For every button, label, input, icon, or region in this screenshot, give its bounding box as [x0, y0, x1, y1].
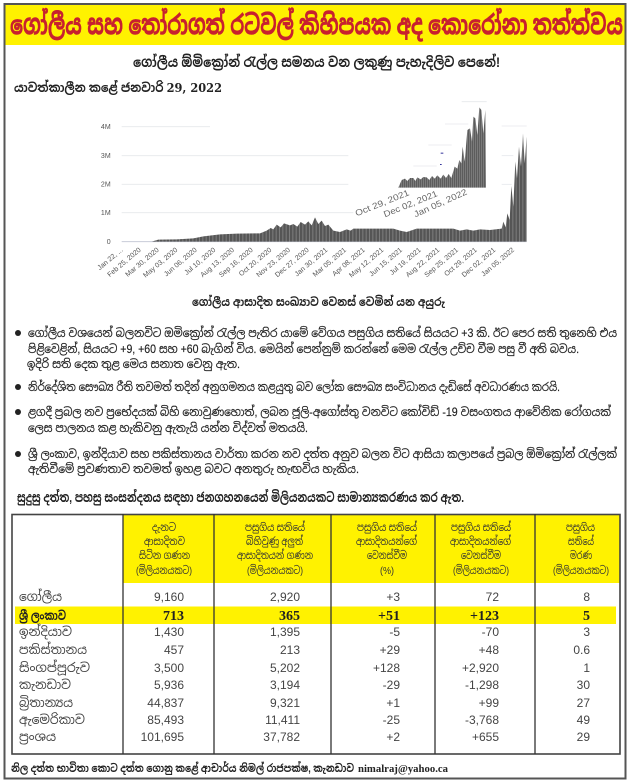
bullet 1: ඉදිරි සති දෙක තුළ මෙය සනාත වෙනු ඇත.	[27, 357, 240, 371]
row: India: ඉන්දියාව	[19, 624, 72, 639]
column 1 header: (මිලියනයකට)	[136, 564, 192, 577]
x axis date labels: Aug 13, 2020	[200, 247, 236, 279]
inset date labels: Oct 29, 2021	[354, 187, 411, 218]
chart caption: ගෝලීය ආසාදිත සංඛ්‍යාව වෙනස් වෙමින් යන අයුරු	[192, 294, 445, 309]
row: India	[19, 624, 590, 639]
row: France: 101,695	[141, 730, 184, 744]
column 5 header	[553, 522, 609, 577]
x axis date labels: Sep 25, 2021	[424, 247, 460, 279]
x axis date labels: Jan 05, 2022	[480, 247, 516, 278]
row: Britain	[19, 695, 590, 710]
row: Singapore: සිංගප්පූරුව	[19, 660, 90, 675]
row: Canada: -29	[383, 678, 400, 692]
area series: main	[152, 133, 527, 242]
row: Pakistan: +48	[479, 643, 499, 657]
row: America: 85,493	[147, 713, 184, 727]
row: global: 2,920	[270, 590, 300, 604]
row: Sri Lanka: 365	[279, 609, 300, 624]
row: Canada: 3,194	[270, 678, 300, 692]
column 4 header: (මිලියනයකට)	[453, 564, 509, 577]
x axis date labels: Jan 22, ...	[97, 247, 125, 272]
row: global: 9,160	[154, 590, 184, 604]
column 1 header: සිටින ගණන	[139, 549, 190, 562]
source credit: nimalraj@yahoo.ca	[358, 764, 448, 775]
row: India: 1,395	[270, 625, 300, 639]
x axis date labels: Oct 20, 2020	[238, 247, 273, 278]
row: America: 49	[577, 713, 590, 727]
y axis labels: 1M	[101, 210, 111, 217]
column 2 header	[237, 520, 313, 577]
row: France: +655	[472, 730, 499, 744]
y axis labels: 3M	[101, 153, 111, 160]
x axis date labels: Mar 30, 2020	[125, 247, 161, 279]
y axis labels: 0	[107, 239, 111, 246]
inset date labels: Dec 02, 2021	[382, 188, 439, 219]
row: France	[19, 730, 590, 744]
row: Canada: -1,298	[465, 678, 499, 692]
row: Sri Lanka: +123	[470, 609, 499, 624]
row: Singapore: +2,920	[462, 661, 499, 675]
x axis date labels: Sep 16, 2020	[218, 247, 255, 279]
row: America: -25	[383, 713, 400, 727]
row: France: 37,782	[263, 730, 300, 744]
column 4 header: ආසාදිතයන්ගේ	[450, 534, 511, 548]
row: Singapore: +128	[373, 661, 400, 675]
x axis date labels: May 12, 2021	[348, 247, 385, 279]
x axis date labels: Oct 29, 2021	[443, 247, 479, 278]
bullet 3: ලෙස පාලනය කළ හැකිවනු ඇතැයි යන්න විද්වත් මතයයි.	[28, 421, 308, 435]
column 4 header	[450, 520, 511, 577]
row: Canada: 5,936	[154, 678, 184, 692]
row: Singapore	[19, 660, 590, 675]
x axis date labels: Mar 05, 2021	[312, 247, 348, 279]
column 5 header: මරණ	[570, 549, 592, 562]
column 4 header: පසුගිය සතියේ	[451, 520, 511, 534]
row: Pakistan: +29	[380, 643, 400, 657]
x axis date labels: Jan 30, 2021	[294, 247, 329, 278]
row: global: ගෝලීය	[19, 589, 62, 604]
row: Pakistan: 213	[280, 643, 300, 657]
column 5 header: (මිලියනයකට)	[553, 564, 609, 577]
x axis date labels: Dec 27, 2020	[274, 247, 311, 279]
row: France: ප්‍රංශය	[19, 730, 56, 744]
row: Britain: 9,321	[270, 696, 300, 710]
row: America: 11,411	[265, 713, 300, 727]
row: Singapore: 3,500	[154, 661, 184, 675]
row: India: -5	[389, 625, 400, 639]
table header cells	[123, 515, 620, 583]
row: Britain: 27	[577, 696, 590, 710]
row: Pakistan: 457	[164, 643, 184, 657]
data table	[12, 514, 620, 754]
update date: යාවත්කාලීන කළේ ජනවාරි 29, 2022	[14, 79, 222, 95]
column 5 header: පසුගිය	[566, 522, 595, 534]
column 2 header: පසුගිය සතියේ	[245, 520, 305, 534]
x axis date labels: Jul 19, 2021	[389, 247, 423, 277]
row: Sri Lanka: 713	[163, 609, 184, 624]
row: Sri Lanka: ශ්‍රී ලංකාව	[19, 608, 66, 623]
column 2 header: (මිලියනයකට)	[247, 564, 303, 577]
bullet 1: පිළිවෙළින්, සියයට +9, +60 සහ +60 බැගින් විය. මෙයින් පෙන්නුම් කරන්නේ මෙම රැල්ල උච්ච වීම පසු වී අති බවය.	[28, 342, 579, 356]
x axis date labels: Nov 23, 2020	[256, 247, 292, 279]
row: global	[19, 589, 590, 604]
row: global: 72	[486, 590, 499, 604]
bullet 4	[15, 447, 617, 476]
column 1 header: දැනට	[152, 522, 176, 534]
column 3 header: ආසාදිතයන්ගේ	[356, 534, 417, 548]
column 4 header: වෙනස්වීම	[461, 548, 501, 562]
row: Britain: +1	[386, 696, 400, 710]
row: Britain: 44,837	[147, 696, 184, 710]
row: Pakistan	[19, 642, 590, 657]
row: Singapore: 5,202	[270, 661, 300, 675]
row: Britain: බ්‍රිතාන්‍යය	[19, 695, 73, 710]
area series: inset zoom	[398, 107, 486, 188]
row: Sri Lanka	[19, 608, 590, 624]
source credit: නිල දත්ත භාවිතා කොට දත්ත ගොනු කළේ ආචාර්ය නිමල් රාජපක්ෂ, කැනඩාව	[11, 760, 354, 775]
x axis date labels: Apr 08, 2021	[331, 247, 367, 278]
x axis date labels: Jul 10, 2020	[184, 247, 217, 277]
row: India: -70	[482, 625, 499, 639]
row: Sri Lanka: 5	[583, 609, 590, 624]
column 3 header: වෙනස්වීම	[367, 548, 407, 562]
y axis labels	[101, 124, 111, 246]
column 2 header: ආසාදිතයන් ගණන	[237, 548, 313, 562]
row: America: ඇමෙරිකාව	[19, 712, 85, 727]
bullet 1	[15, 326, 617, 371]
row: Pakistan: 0.6	[573, 643, 590, 657]
column 1 header	[136, 522, 192, 577]
row: India: 3	[583, 625, 590, 639]
column 2 header: බිහිවුණු අලුත්	[246, 534, 303, 548]
table note: සුදුසු දත්ත, පහසු සංසන්දනය සඳහා ජනගහනයෙන් මිලියනයකට සාමාන්‍යකරණය කර ඇත.	[17, 489, 464, 506]
y axis labels: 2M	[101, 182, 111, 189]
column 3 header: පසුගිය සතියේ	[357, 520, 417, 534]
column 3 header	[356, 520, 417, 577]
row: Sri Lanka: +51	[378, 609, 400, 624]
x axis date labels: Dec 02, 2021	[461, 247, 497, 279]
inset date labels: Jan 05, 2022	[412, 187, 469, 219]
x axis date labels	[97, 247, 516, 279]
row: global: +3	[386, 590, 400, 604]
row: Canada: 30	[577, 678, 590, 692]
x axis date labels: Jun 15, 2021	[368, 247, 404, 278]
column 1 header: ආසාදිතව	[144, 536, 185, 548]
row: global: 8	[583, 590, 590, 604]
chart: global infections over time	[97, 101, 527, 279]
bullet 4: ඇතිවීමේ ප්‍රවණතාව තවමත් ඉහළ බවට අනතුරු හැඟවිය හැකිය.	[28, 462, 359, 476]
row: Canada: කැනඩාව	[19, 678, 71, 692]
x axis date labels: May 03, 2020	[142, 247, 179, 279]
highlighted row: Sri Lanka	[15, 606, 616, 624]
x axis date labels: Aug 22, 2021	[405, 247, 441, 279]
row: Pakistan: පකිස්තානය	[19, 642, 87, 657]
bullet 3	[15, 405, 611, 435]
row: France: 29	[577, 730, 590, 744]
row: Britain: +99	[479, 696, 499, 710]
row: America: -3,768	[465, 713, 499, 727]
bullet 2: නිර්දේශිත සෞඛ්‍ය රීති තවමත් තදින් අනුගමනය කළයුතු බව ලෝක සෞඛ්‍ය සංවිධානය දැඩිසේ අවධාරණය කරයි.	[28, 380, 560, 394]
row: America	[19, 712, 590, 727]
inset date labels	[354, 187, 469, 219]
column 3 header: (%)	[380, 565, 394, 577]
subtitle: ගෝලීය ඕමික්‍රෝන් රැල්ල සමනය වන ලකුණු පැහැදිලිව පෙනේ!	[133, 53, 500, 71]
inset small markers	[440, 153, 443, 165]
column 5 header: සතියේ	[568, 534, 594, 548]
row: France: +2	[386, 730, 400, 744]
y axis labels: 4M	[101, 124, 111, 131]
row: Singapore: 1	[583, 661, 590, 675]
row: Canada	[19, 678, 590, 692]
x axis date labels: Jun 06, 2020	[163, 247, 199, 278]
row: India: 1,430	[154, 625, 184, 639]
x axis date labels: Feb 25, 2020	[107, 247, 143, 279]
